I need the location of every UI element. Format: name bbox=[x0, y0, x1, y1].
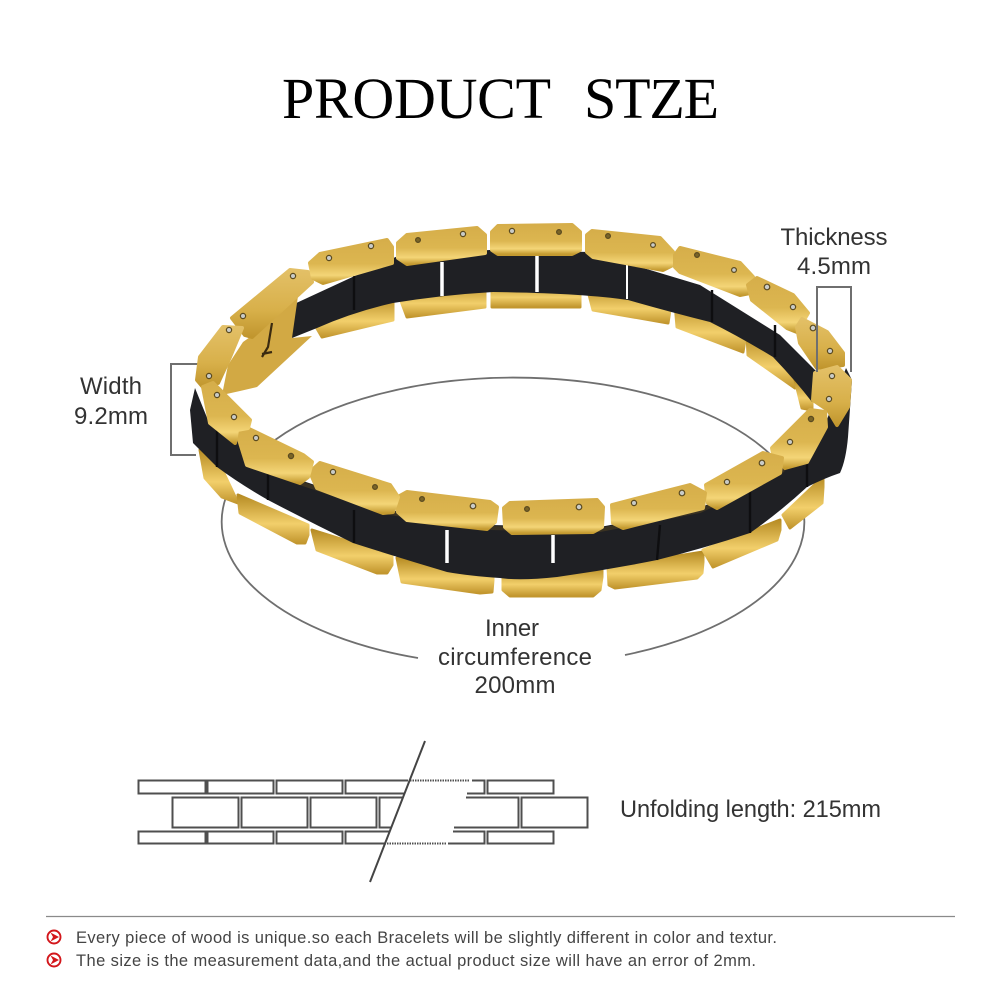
inner circumference ellipse lines bbox=[222, 378, 804, 658]
title: STZE bbox=[584, 66, 719, 131]
inner circumference label: Inner bbox=[485, 615, 539, 642]
bracelet bbox=[190, 225, 852, 596]
thickness bracket bbox=[817, 287, 851, 372]
inner circumference label bbox=[438, 615, 592, 699]
front black band bbox=[190, 368, 852, 579]
footer divider bbox=[46, 916, 955, 918]
width bracket bbox=[171, 364, 198, 455]
width label bbox=[74, 373, 148, 430]
inner circumference label: 200mm bbox=[474, 672, 556, 699]
title: PRODUCT bbox=[282, 66, 551, 131]
note 1: Every piece of wood is unique.so each Bracelets will be slightly different in color and textur. bbox=[76, 929, 777, 947]
width label: Width bbox=[80, 373, 142, 400]
thickness label: Thickness bbox=[780, 224, 888, 251]
title bbox=[282, 66, 719, 131]
bullet icon 2 bbox=[48, 954, 60, 966]
clasp plate bbox=[222, 282, 312, 395]
back black band bbox=[292, 250, 830, 402]
width label: 9.2mm bbox=[74, 403, 148, 430]
link pins bbox=[206, 228, 835, 511]
inner circumference label: circumference bbox=[438, 644, 592, 671]
bullet icon 1 bbox=[48, 930, 60, 944]
front top gold links bbox=[203, 367, 850, 533]
unfolding length label: Unfolding length: 215mm bbox=[620, 797, 881, 823]
back top gold links bbox=[197, 225, 843, 387]
thickness label: 4.5mm bbox=[797, 253, 871, 280]
note 2: The size is the measurement data,and the actual product size will have an error of 2mm. bbox=[76, 952, 756, 970]
front lower gold links bbox=[200, 450, 823, 596]
back lower gold links bbox=[312, 283, 812, 410]
thickness label bbox=[780, 224, 888, 280]
unfolded bracelet diagram bbox=[138, 741, 588, 882]
